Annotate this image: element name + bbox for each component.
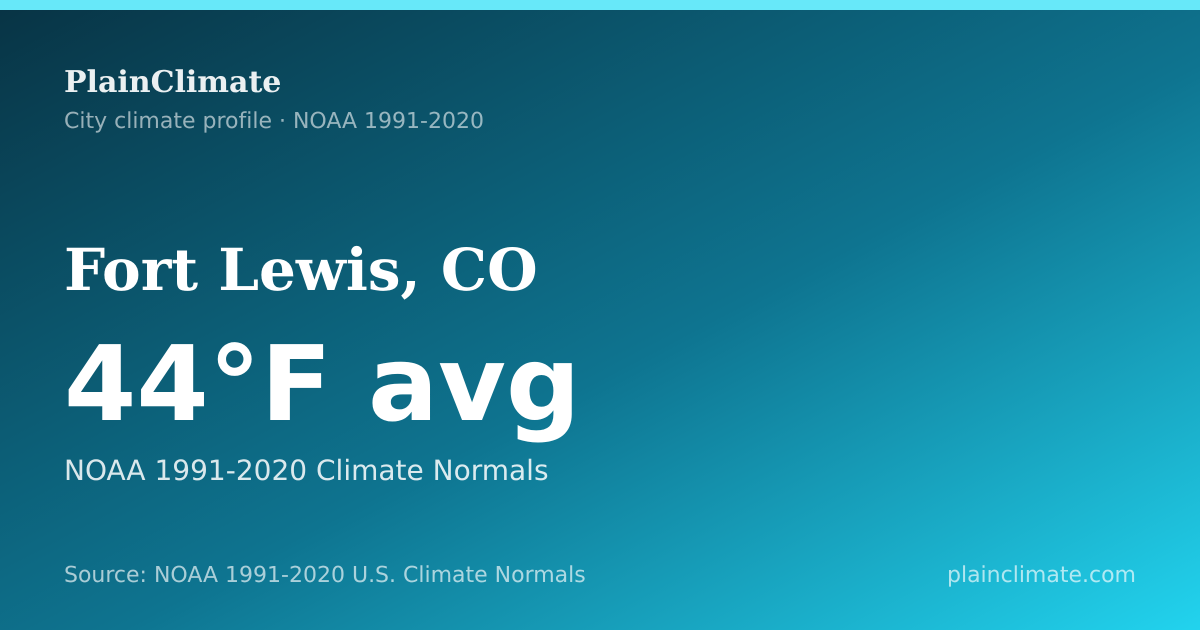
brand tagline: City climate profile · NOAA 1991-2020: [64, 109, 484, 134]
average temperature: 44°F avg: [64, 323, 580, 445]
dataset subtitle: NOAA 1991-2020 Climate Normals: [64, 454, 549, 487]
website: plainclimate.com: [947, 563, 1136, 588]
city title: Fort Lewis, CO: [64, 236, 538, 304]
source note: Source: NOAA 1991-2020 U.S. Climate Normals: [64, 563, 586, 588]
top accent bar: [0, 0, 1200, 10]
brand name: PlainClimate: [64, 65, 281, 100]
